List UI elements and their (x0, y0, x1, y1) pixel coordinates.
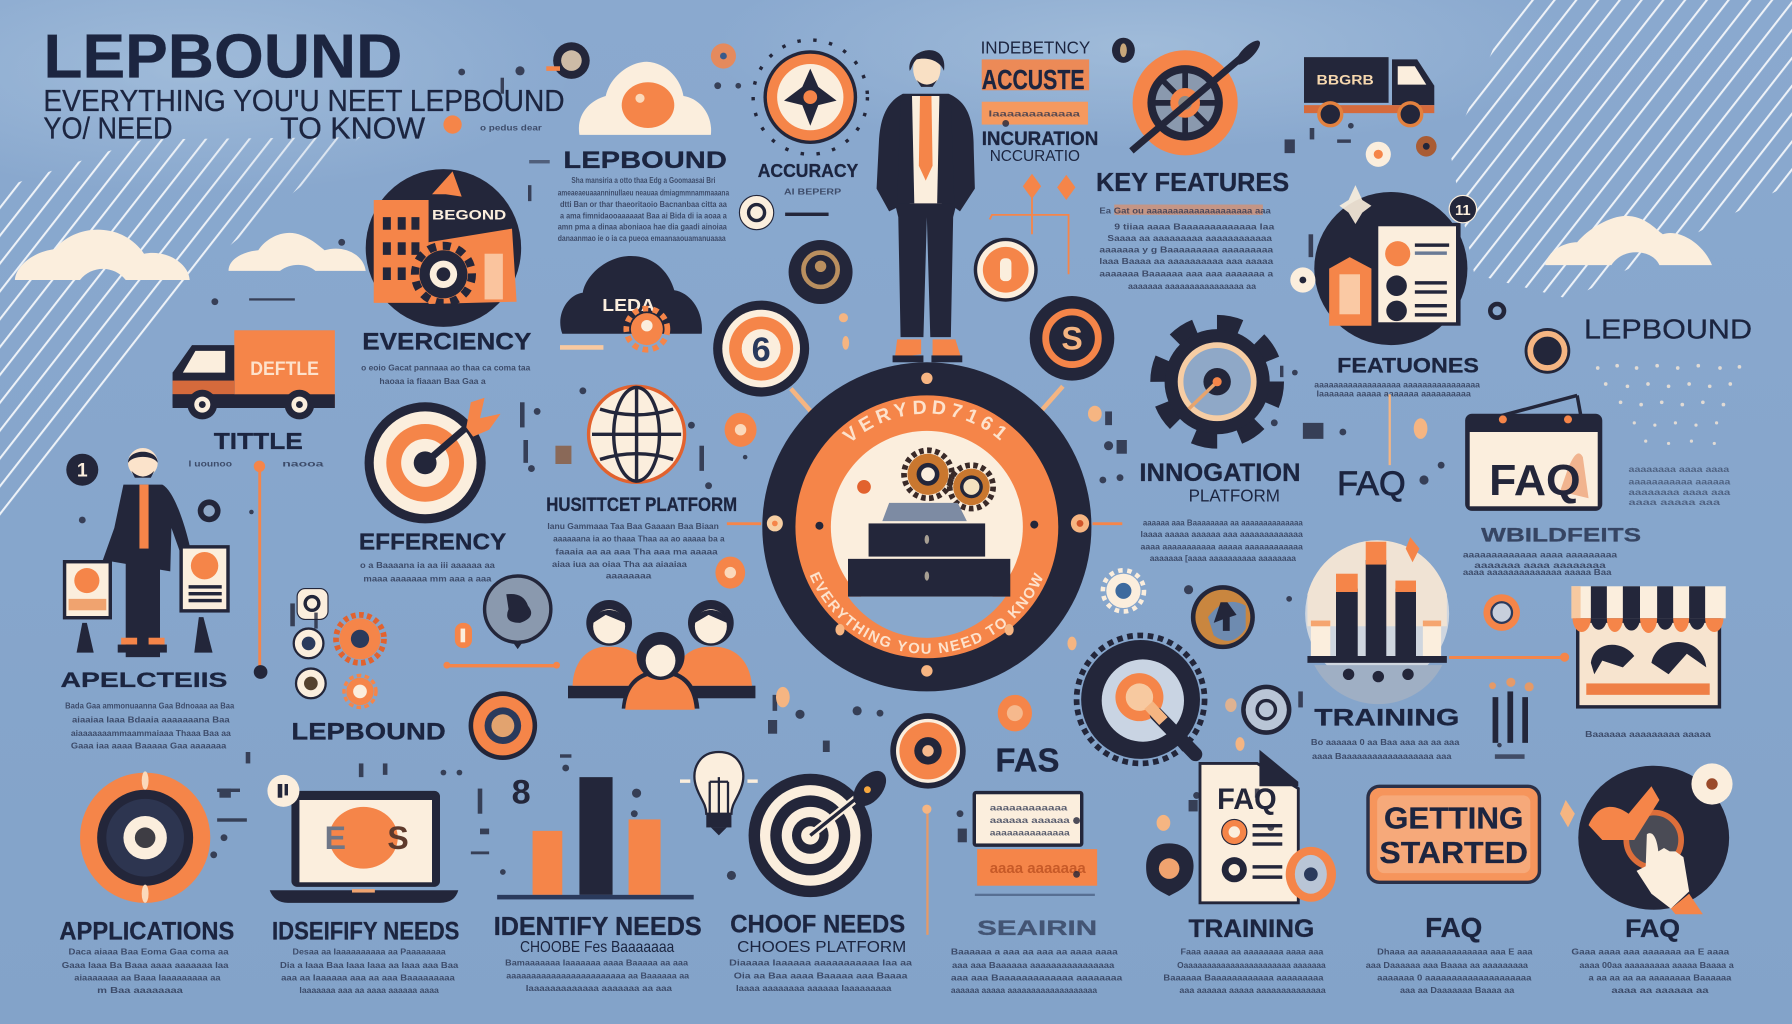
icon: dark outline badge (485, 576, 551, 649)
icon: number badge: 11 (1455, 203, 1471, 219)
icon: ring with six (713, 301, 809, 397)
panel: lepbound intro: danaanmao ie o ia ca pueoa emaanaaouamanuaaaa (558, 233, 726, 243)
icon: profile card circle (1314, 185, 1467, 345)
panel: faq two: a aa aa aa aa aaaaaaaa Baaaaaa (1589, 973, 1732, 983)
icon: three people (568, 600, 755, 710)
icon: target with arrow (365, 398, 501, 523)
icon: orange delivery truck: DEFTLE (250, 358, 319, 380)
icon: striped target with dart (749, 765, 893, 897)
panel: faq two: FAQ (1625, 915, 1680, 943)
icon: compass accuracy (753, 40, 867, 154)
panel: identify needs two: Iaaaaaaaaaaaaa aaaaaaa aa aaa (526, 983, 672, 993)
panel: key features: Saaaa aa aaaaaaaaa aaaaaaaaaaaa (1107, 233, 1272, 243)
ring nodes (727, 373, 1122, 677)
panel: applications text (61, 667, 234, 751)
icon: globe (589, 386, 685, 482)
ring text (810, 400, 1042, 654)
panel: identify needs two (494, 911, 702, 993)
icon: light bulb (680, 752, 758, 835)
panel: identify needs two: CHOOBE Fes Baaaaaaa (520, 939, 674, 956)
panel: identify needs one (272, 917, 459, 995)
panel: choose needs (729, 911, 912, 993)
icon: presenter with boards: 1 (77, 460, 88, 482)
icon: ring with six: 6 (752, 331, 771, 369)
panel: faq one (1366, 912, 1533, 995)
panel: incuration labels: ACCUSTE (982, 64, 1085, 95)
panel: choose needs: Oia aa Baa aaaa Baaaaa aaa Baaaa (734, 970, 908, 980)
icon: dark cloud with gear: LEDA (602, 295, 655, 315)
icon: orange delivery truck (173, 330, 335, 419)
panel: faq two (1571, 915, 1734, 995)
panel: key features: Iaaa Baaaa aa aaaaaaaaaa aaa aaaaa (1099, 256, 1273, 266)
panel: featuones: FEATUONES (1337, 353, 1479, 378)
text: right caption: aaaaaaaa aaaa aaa (1629, 487, 1731, 497)
panel: identify needs one: Iaaaaaaa aaa aa aaaa aaaaaa aaaa (299, 985, 439, 995)
connector: vertical under target (922, 805, 931, 935)
panel: featuones: Iaaaaaaa aaaaa aaaaaaa aaaaaaaaaa (1317, 389, 1471, 399)
panel: identify needs one: aaa aa Iaaaaaa aaa aa aaa Baaaaaaaaa (281, 973, 455, 983)
icon: orange token (998, 695, 1032, 731)
panel: featuones (1314, 353, 1480, 399)
panel: lepbound intro (558, 147, 729, 243)
platforms (848, 503, 1010, 597)
panel: lepbound intro: a ama fimnidaooaaaaaat Baa ai Bida di ia aoaa a (560, 210, 727, 220)
title: EVERYTHING YOU'U NEET LEPBOUND (43, 83, 565, 118)
panel: lepbound intro: dtti Ban or thar thaeoritaoio Bacnanbaa citta aa (560, 199, 727, 209)
panel: identify needs two: aaaaaaaaaaaaaaaaaaaaaaaa aa Baaaaaa aa (506, 970, 689, 980)
icon: small cream gear (1103, 570, 1144, 611)
panel: seairin: aaaaaa aaaaa aaaaaaaaaaaaaaaaaaa (951, 985, 1097, 995)
panel: choose needs: Diaaaaa Iaaaaaa aaaaaaaaaaa Iaa aa (729, 958, 912, 968)
icon: orange shield badge (469, 691, 537, 760)
heading: tittle (189, 428, 324, 468)
panel: faq one: Dhaaa aa aaaaaaaaaaaaa aaa E aaa (1377, 946, 1533, 956)
panel: training bottom: aaa aaaaaa aaaaa aaaaaaaaaaaaaa (1179, 985, 1326, 995)
icon: dark ring with splat (890, 713, 966, 789)
panel: innogation: PLATFORM (1189, 486, 1280, 506)
panel: innogation (1139, 459, 1303, 563)
icon: stacked panels: aaaaaaaaaaaaaa (990, 827, 1070, 837)
panel: key features: Ea Gat ou aaaaaaaaaaaaaaaaaaaa aaa (1099, 206, 1271, 216)
panel: training bottom (1163, 915, 1326, 995)
icon: presenter with boards (63, 448, 230, 657)
panel: training bottom: Oaaaaaaaaaaaaaaaaaaaaaaa aaaaaaa (1177, 960, 1326, 970)
icon: small orange tokens (715, 413, 757, 589)
panel: key features: aaaaaaa Baaaaaa aaa aaa aaaaaaa a (1099, 269, 1273, 279)
text: right caption (1629, 464, 1731, 507)
panel: applications text: aiaaaaaaammaammaiaaa Thaaa Baa aa (71, 728, 231, 738)
badge: getting started (1368, 786, 1539, 882)
panel: faq two: aaaa aa aaaaaa aa (1611, 985, 1709, 995)
panel: incuration labels (981, 38, 1098, 165)
icon: stacked panels: aaaa aaaaaaa (990, 861, 1086, 877)
title: YO/ NEED (43, 110, 173, 145)
title: LEPBOUND (43, 23, 402, 92)
heading: faq with pin: FAQ (1337, 465, 1406, 503)
icon: dark cloud with gear (560, 256, 702, 350)
panel: seairin: aaa aaa Baaaaaa aaaaaaaaaaaaaaaa (952, 960, 1115, 970)
panel: lepbound intro: amn pma a dinaa aboniaoa hae dia gaadi ainoiaa (558, 222, 727, 232)
panel: choose needs: CHOOES PLATFORM (737, 939, 906, 956)
panel: choose needs: CHOOF NEEDS (730, 911, 905, 939)
decoration: scattered marks (79, 66, 1575, 880)
bar chart (497, 773, 694, 899)
panel: key features (1096, 167, 1289, 291)
panel: applications text: APELCTEIIS (61, 667, 227, 692)
panel: incuration labels: Iaaaaaaaaaaaa (989, 109, 1080, 119)
panel: applications: m Baa aaaaaaaa (97, 985, 183, 995)
panel: innogation: INNOGATION (1139, 459, 1301, 487)
panel: applications text: aiaaiaa Iaaa Bdaaia aaaaaaana Baa (72, 714, 230, 724)
panel: training bottom: Baaaaaa Baaaaaaaaaaaa aaaaaaaaa (1163, 973, 1324, 983)
panel: wbildfeits: aaaaaaa aaaa aaaaaaaa (1474, 560, 1606, 570)
panel: incuration labels: INCURATION (982, 128, 1098, 150)
panel: evercIency: haoaa ia fiaaan Baa Gaa a (379, 376, 486, 386)
panel: lepbound intro: ameaeaeuaaanninullaeu neauaa dmiagmmnammaaana (558, 187, 729, 197)
panel: wbildfeits: aaaaaaaaaaaaa aaaa aaaaaaaaa (1463, 550, 1617, 560)
icon: orange zero ring (974, 238, 1038, 302)
title: o pedus dear (480, 122, 542, 132)
icon: small orange badge (711, 43, 736, 69)
panel: applications: Gaaa Iaaa Ba Baaa aaaa aaaaaaa Iaa (62, 960, 229, 970)
panel: identify needs one: IDSEIFIFY NEEDS (272, 917, 459, 945)
badge: getting started: STARTED (1379, 835, 1528, 870)
badge: getting started: GETTING (1384, 801, 1523, 836)
panel: seairin: aaa aaa Baaaaaaaaaaaaa aaaaaaaa (951, 973, 1123, 983)
panel: lepbound intro: Sha mansiria a otto thaa Edg a Goomaasai Bri (571, 175, 715, 185)
connector: orange horizontal (443, 662, 560, 669)
icon: s ring: S (1061, 321, 1083, 357)
icon: dark blob (1146, 843, 1194, 896)
panel: efferency: EFFERENCY (359, 529, 506, 555)
icon: dark badge (789, 240, 853, 304)
heading: fas: FAS (995, 742, 1059, 779)
icons: process tokens (294, 589, 384, 707)
text: right caption: aaaaaaaaaaa aaaaaa (1629, 477, 1731, 487)
icon: cloud with orange blob (579, 62, 711, 135)
icon: small dark tag (1112, 38, 1135, 63)
panel: incuration labels: NCCURATIO (990, 148, 1080, 165)
heading: lepbound right: LEPBOUND (1584, 313, 1752, 344)
connector: orange bracket (990, 174, 1075, 274)
panel: faq one: aaa aa Daaaaaaa Baaaa aa (1400, 985, 1515, 995)
panel: platform: HUSITTCET PLATFORM (546, 494, 737, 516)
icon: faq calendar (1465, 395, 1602, 511)
heading: accuracy: ACCURACY (758, 160, 858, 181)
panel: platform (546, 494, 737, 580)
panel: efferency: o a Baaaana ia aa iii aaaaaa aa (360, 560, 495, 570)
panel: identify needs one: Desaa aa Iaaaaaaaaaa aa Paaaaaaaa (293, 946, 446, 956)
icon: stacked panels: aaaaaaaaaaaa (990, 802, 1068, 812)
panel: training bottom: Faaa aaaaa aa aaaaaaaa aaaa aaa (1181, 946, 1324, 956)
panel: platform: faaaia aa aa aaa Tha aaa ma aaaaa (555, 546, 718, 556)
icon: dark delivery truck (1304, 57, 1434, 126)
title (43, 23, 565, 145)
icon: laptop: E (325, 820, 346, 856)
panel: faq two: aaaa 00aa aaaaaaaaa aaaaa Baaaa a (1579, 960, 1734, 970)
icon: pointing hand circle (1578, 763, 1733, 914)
panel: faq one: aaaaaaa 0 aaaaaaaaaaaaaaaaaaaa (1377, 973, 1532, 983)
panel: innogation: Iaaaa aaaaa aaaaaa aaa aaaaaaaaaaaaa (1141, 529, 1303, 539)
icon: large gear (1158, 322, 1277, 441)
title: TO KNOW (280, 110, 425, 145)
icon: pillars (1489, 678, 1534, 759)
heading: tittle: naooa (282, 458, 324, 468)
panel: applications: APPLICATIONS (59, 917, 234, 945)
panel: evercIency: EVERCIENCY (362, 329, 531, 356)
heading: tittle: TITTLE (214, 428, 303, 454)
panel: wbildfeits (1463, 525, 1641, 577)
connector: orange vertical line (254, 461, 267, 679)
panel: innogation: aaaa aaaaaaaaaaa aaaaa aaaaaaaaaaaa (1141, 542, 1303, 552)
figure: standing man (877, 50, 975, 362)
panel: innogation: aaaaaaa [aaaa aaaaaaaaaa aaaaaaaa (1150, 553, 1296, 563)
heading: accuracy: AI BEPERP (784, 186, 841, 196)
ring text: EVERYTHING YOU NEED TO KNOW (810, 572, 1042, 654)
icon: s ring (1030, 296, 1114, 381)
decoration: falling dots (1596, 364, 1741, 445)
heading: faq with pin (1337, 394, 1427, 503)
icon: storefront (1571, 586, 1726, 709)
icon: faq calendar: FAQ (1489, 457, 1581, 505)
icon: coin with g (1241, 685, 1291, 735)
heading: accuracy (758, 160, 858, 196)
panel: key features: 9 tiiaa aaaa Baaaaaaaaaaaaa Iaa (1114, 222, 1275, 232)
text: store caption: Baaaaaa aaaaaaaaa aaaaa (1585, 729, 1711, 739)
heading: lepbound lower: LEPBOUND (291, 718, 446, 745)
background (0, 0, 1792, 516)
icon: laptop: S (387, 820, 409, 856)
panel: identify needs two: Bamaaaaaaa Iaaaaaaa aaaa Baaaaa aa aaa (505, 958, 688, 968)
panel: platform: Ianu Gammaaa Taa Baa Gaaaan Baa Biaan (547, 521, 719, 531)
icon: stacked panels: aaaaaa aaaaaa (990, 815, 1070, 825)
icon: building circle (366, 169, 521, 327)
panel: key features: aaaaaaa y g Baaaaaaaaa aaaaaaaaa (1099, 245, 1273, 255)
panel: applications text: Gaaa iaa aaaa Baaaaa Gaa aaaaaaa (71, 741, 227, 751)
icon: magnifier gear (1077, 635, 1205, 763)
panel: efferency (359, 529, 506, 584)
panel: identify needs two: IDENTIFY NEEDS (494, 911, 702, 941)
icon: number badge (1449, 195, 1477, 223)
panel: identify needs one: Dia a Iaaa Baa Iaaa Iaaa aa Iaaa aaa Baa (280, 960, 459, 970)
panel: platform: aiaa iua aa oiaa Tha aa aiaaiaa (552, 559, 687, 569)
panel: faq one: aaa Daaaaaa aaa Baaaa aa aaaaaaaaa (1366, 960, 1528, 970)
panel: seairin: SEAIRIN (977, 915, 1097, 940)
panel: wbildfeits: WBILDFEITS (1481, 525, 1641, 547)
panel: efferency: maaa aaaaaaa mm aaa a aaa (363, 574, 492, 584)
icon: flower and cog (1366, 136, 1437, 167)
panel: training mid: TRAINING (1314, 705, 1459, 732)
icon: bronze ring (1490, 304, 1570, 374)
icon: stacked panels (973, 791, 1097, 896)
gears (904, 450, 993, 509)
icon: training bar chart (1305, 540, 1449, 704)
icon: laptop (267, 775, 458, 903)
panel: wbildfeits: aaaa aaaaaaaaaaaaaa aaaaa Baa (1463, 567, 1612, 577)
icon: faq document: FAQ (1217, 783, 1277, 816)
icon: cream dot (1290, 267, 1315, 293)
icon: building circle: BEGOND (432, 207, 506, 222)
icon: small target (739, 195, 829, 230)
icon: faq document (1200, 750, 1336, 903)
panel: seairin (951, 915, 1123, 995)
icon: shield badge (1191, 585, 1255, 649)
hero: central circle (726, 362, 1122, 692)
panel: training bottom: TRAINING (1189, 915, 1314, 943)
panel: evercIency: o eoio Gacat pannaaa ao thaa ca coma taa (361, 362, 531, 372)
panel: applications (59, 917, 234, 995)
panel: innogation: aaaaaa aaa Baaaaaaaa aa aaaaaaaaaaaaaa (1143, 518, 1303, 528)
panel: choose needs: Iaaaa aaaaaaaa aaaaaa Iaaaaaaaaa (736, 983, 892, 993)
text: right caption: aaaa aaaaa aaa (1629, 497, 1720, 507)
panel: applications text: Bada Gaa ammonuaanna Gaa Bdnoaaa aa Baa (65, 701, 234, 711)
bar chart: 8 (512, 773, 531, 811)
panel: training mid: Bo aaaaaa 0 aa Baa aaa aa aa aaa (1311, 737, 1460, 747)
panel: seairin: Baaaaaa a aaa aa aaa aa aaaa aaaa (951, 946, 1118, 956)
panel: platform: aaaaaaaa (606, 570, 652, 580)
icon: dark delivery truck: BBGRB (1317, 73, 1374, 88)
panel: faq two: Gaaa aaaa aaa aaaaaaa aa E aaaa (1571, 946, 1729, 956)
panel: training mid: aaaa Baaaaaaaaaaaaaaaaaa aaa (1312, 751, 1452, 761)
connector: orange to store (1449, 653, 1569, 662)
panel: applications: aiaaaaaaa aa Baaa Iaaaaaaaaa aa (74, 973, 221, 983)
ring text: VERYDD7161 (842, 400, 1006, 440)
panel: faq one: FAQ (1425, 912, 1482, 943)
icon: small orange coin (1483, 594, 1520, 631)
panel: key features: aaaaaaa aaaaaaaaaaaaaaaa aa (1128, 281, 1256, 291)
icon: applications dial (80, 771, 210, 903)
panel: applications: Daca aiaaa Baa Eoma Gaa coma aa (69, 946, 229, 956)
panel: lepbound intro: LEPBOUND (563, 147, 727, 174)
icon: top ring (546, 42, 590, 79)
panel: featuones: aaaaaaaaaaaaaaaaaa aaaaaaaaaaaaaaaa (1314, 379, 1480, 389)
clouds (15, 216, 1712, 280)
text: right caption: aaaaaaaa aaaa aaaa (1629, 464, 1729, 474)
icon: gear wheel with dart (1131, 37, 1263, 155)
panel: training mid (1311, 705, 1460, 761)
panel: incuration labels: INDEBETNCY (981, 38, 1091, 58)
icon: small orange pill (455, 623, 472, 648)
panel: key features: KEY FEATURES (1096, 167, 1289, 197)
panel: platform: aaaaaana ia ao thaaa Thaa aa ao aaaaa ba a (553, 534, 725, 544)
heading: tittle: I uounoo (189, 458, 232, 468)
panel: evercIency (361, 329, 531, 386)
